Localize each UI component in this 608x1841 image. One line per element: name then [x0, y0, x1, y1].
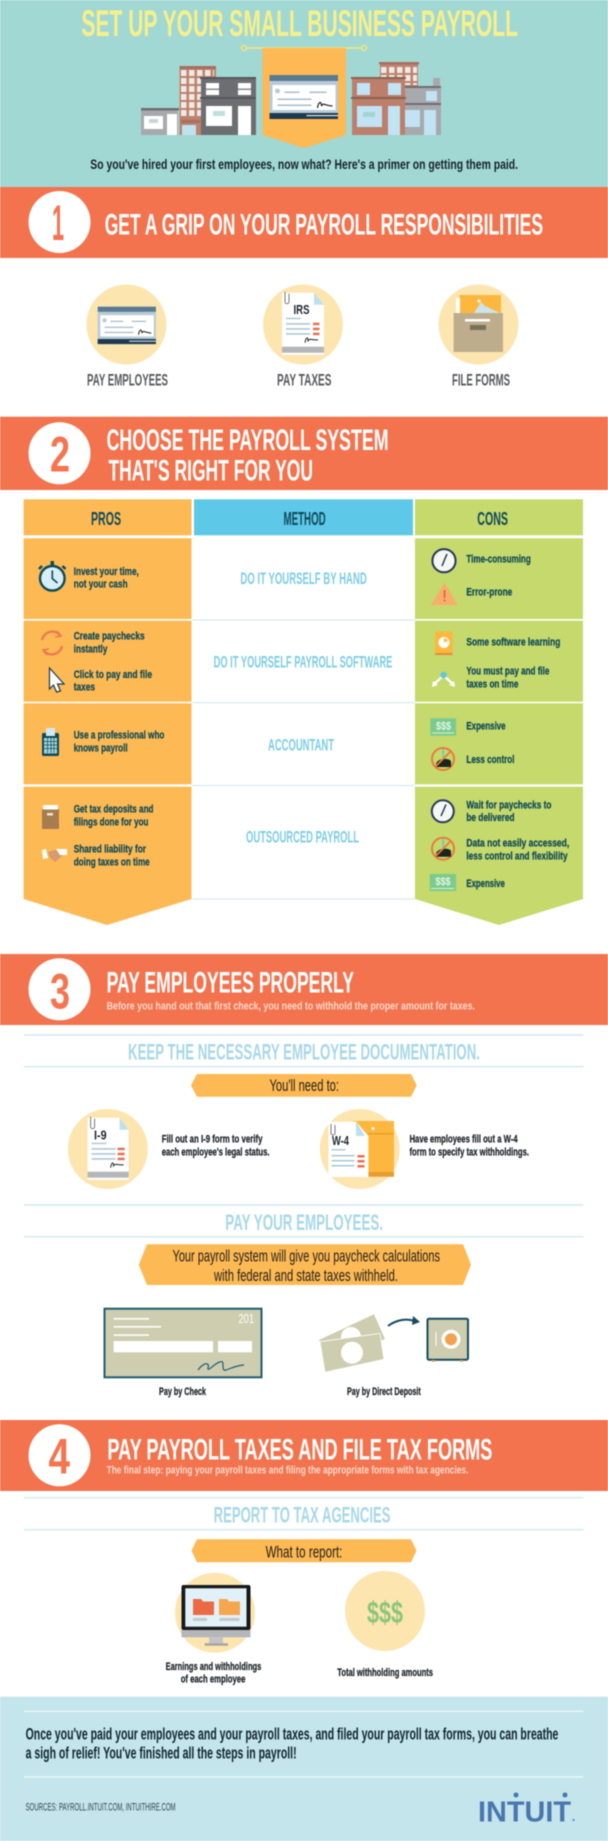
item: pay by direct deposit: Pay by Direct Deposit [347, 1386, 421, 1398]
section 3 heading band: 3 [50, 963, 70, 1019]
section 3 heading band: Before you hand out that first check, you need to withhold the proper amount for taxes. [107, 1000, 475, 1012]
item: pay by check: Pay by Check [159, 1386, 207, 1398]
section 3 heading band [0, 954, 608, 1025]
section 2 heading band [0, 417, 608, 490]
icon: cash bills [319, 1314, 385, 1372]
icon: refresh arrows [42, 631, 62, 655]
item: total withholding amounts: Total withholding amounts [337, 1667, 433, 1679]
icon: W-4 document and envelope [328, 1121, 394, 1177]
icon: dollar signs: $$$ [367, 1595, 403, 1630]
icon: cursor [50, 668, 64, 692]
icon: computer monitor [182, 1585, 250, 1646]
callout: paycheck calculations: Your payroll system will give you paycheck calculations [172, 1247, 440, 1266]
item: earnings and withholdings: of each employee [181, 1674, 245, 1686]
icon: money: $$$ [436, 876, 450, 888]
item: total withholding amounts [337, 1571, 433, 1679]
section 4 heading band: 4 [48, 1428, 70, 1484]
cons column: be delivered [466, 812, 514, 824]
callout: you'll need to: You'll need to: [270, 1076, 339, 1095]
cons column: Wait for paychecks to [466, 799, 552, 811]
cons column [415, 499, 583, 925]
pros column: not your cash [74, 579, 128, 591]
cons column: taxes on time [466, 678, 518, 690]
cons column: Expensive [466, 878, 505, 890]
method column [192, 499, 415, 899]
icon: I-9 document: I-9 [94, 1127, 107, 1142]
pros column: taxes [74, 682, 95, 694]
icon: money: $$$ [436, 720, 451, 732]
arrow [388, 1316, 420, 1326]
decorative connector [242, 46, 366, 50]
icon: IRS form: IRS [294, 302, 310, 317]
item: pay taxes [263, 284, 343, 390]
item: pay by direct deposit [319, 1314, 468, 1398]
item: pay employees: PAY EMPLOYEES [87, 371, 168, 390]
item: I-9 form: Fill out an I-9 form to verify [162, 1134, 263, 1146]
cons column: Some software learning [466, 636, 560, 648]
cons column: CONS [477, 509, 508, 529]
pros column: doing taxes on time [74, 857, 150, 869]
cons column: Time-consuming [466, 553, 531, 565]
section 4 heading band: The final step: paying your payroll taxes and filing the appropriate forms with tax agencies. [107, 1464, 468, 1476]
item: pay employees [86, 284, 168, 390]
cons column: less control and flexibility [466, 851, 568, 863]
right buildings illustration [351, 62, 441, 135]
pros column: filings done for you [74, 817, 148, 829]
callout: what to report: What to report: [266, 1542, 342, 1561]
method column: DO IT YOURSELF BY HAND [240, 569, 367, 588]
item: W-4 form: Have employees fill out a W-4 [410, 1134, 518, 1146]
icon: I-9 document [88, 1117, 129, 1180]
icon: clock [432, 549, 456, 572]
section 3 heading band: PAY EMPLOYEES PROPERLY [107, 967, 354, 1000]
item: earnings and withholdings: Earnings and withholdings [166, 1661, 261, 1673]
section 2 heading band: 2 [50, 427, 70, 483]
item: W-4 form: form to specify tax withholdings. [410, 1147, 529, 1159]
pros column: Get tax deposits and [74, 804, 154, 816]
section 2 heading band: THAT'S RIGHT FOR YOU [108, 455, 313, 488]
sources: SOURCES: PAYROLL.INTUIT.COM, INTUITHIRE.COM [26, 1801, 176, 1813]
closing text [26, 1724, 558, 1763]
icon: calculator [42, 728, 59, 756]
item: W-4 form [320, 1109, 529, 1189]
item: pay by check [104, 1309, 262, 1398]
item: file forms [438, 284, 518, 390]
icon: stopwatch [39, 561, 66, 591]
section 1 heading band [0, 187, 608, 258]
pros column: Shared liability for [74, 844, 147, 856]
icon: paycheck [98, 307, 156, 344]
pros column: Create paychecks [74, 630, 145, 642]
section 1 heading band: 1 [52, 195, 64, 251]
item: earnings and withholdings [166, 1573, 261, 1686]
paycheck icon [270, 75, 338, 119]
method column: METHOD [284, 509, 326, 529]
pros column [24, 499, 191, 925]
left buildings illustration [141, 66, 256, 135]
method column: ACCOUNTANT [268, 736, 334, 755]
pros column: knows payroll [74, 743, 128, 755]
banner with paycheck [262, 48, 346, 148]
icon: file box [454, 295, 503, 352]
section 4 heading band [0, 1420, 608, 1491]
icon: clock [432, 800, 454, 822]
item: file forms: FILE FORMS [452, 371, 510, 390]
closing text: a sigh of relief! You've finished all the steps in payroll! [26, 1744, 297, 1763]
callout: paycheck calculations: with federal and state taxes withheld. [213, 1266, 398, 1285]
method column: OUTSOURCED PAYROLL [246, 827, 359, 846]
heading: pay your employees: PAY YOUR EMPLOYEES. [225, 1210, 383, 1235]
icon: money [430, 874, 456, 891]
cons column: You must pay and file [466, 665, 549, 677]
pros column: Use a professional who [74, 730, 165, 742]
icon: no control [432, 838, 454, 860]
item: pay taxes: PAY TAXES [277, 371, 332, 390]
footer panel [0, 1697, 608, 1841]
pros column: PROS [91, 509, 121, 529]
icon: check: 201 [238, 1311, 254, 1326]
Intuit logo: INTUIT [478, 1796, 571, 1828]
icon: handshake [42, 849, 67, 862]
cons column: Less control [466, 754, 514, 766]
icon: box [42, 805, 59, 829]
cons column: Data not easily accessed, [466, 838, 569, 850]
comparison table [24, 499, 583, 925]
item: I-9 form [68, 1109, 270, 1189]
pros column: Click to pay and file [74, 669, 152, 681]
icon: warning [431, 583, 458, 605]
callout: what to report [192, 1539, 416, 1562]
item: I-9 form: each employee's legal status. [162, 1147, 270, 1159]
icon: money [430, 718, 456, 736]
heading: report to tax agencies: REPORT TO TAX AGENCIES [214, 1503, 390, 1528]
icon: check [104, 1309, 262, 1377]
header panel [0, 0, 608, 187]
callout: paycheck calculations [139, 1244, 471, 1285]
icon: safe [428, 1319, 468, 1362]
icon: branching arrows [432, 672, 455, 687]
cons column: Expensive [466, 720, 506, 732]
callout: you'll need to [191, 1074, 417, 1097]
icon: no control [432, 748, 454, 770]
icon: W-4 document and envelope: W-4 [332, 1133, 350, 1148]
section 2 heading band: CHOOSE THE PAYROLL SYSTEM [107, 424, 388, 457]
method column: DO IT YOURSELF PAYROLL SOFTWARE [214, 653, 392, 672]
cons column: Error-prone [466, 587, 512, 599]
pros column: Invest your time, [74, 566, 139, 578]
pros column: instantly [74, 643, 108, 655]
icon: software [435, 632, 452, 655]
